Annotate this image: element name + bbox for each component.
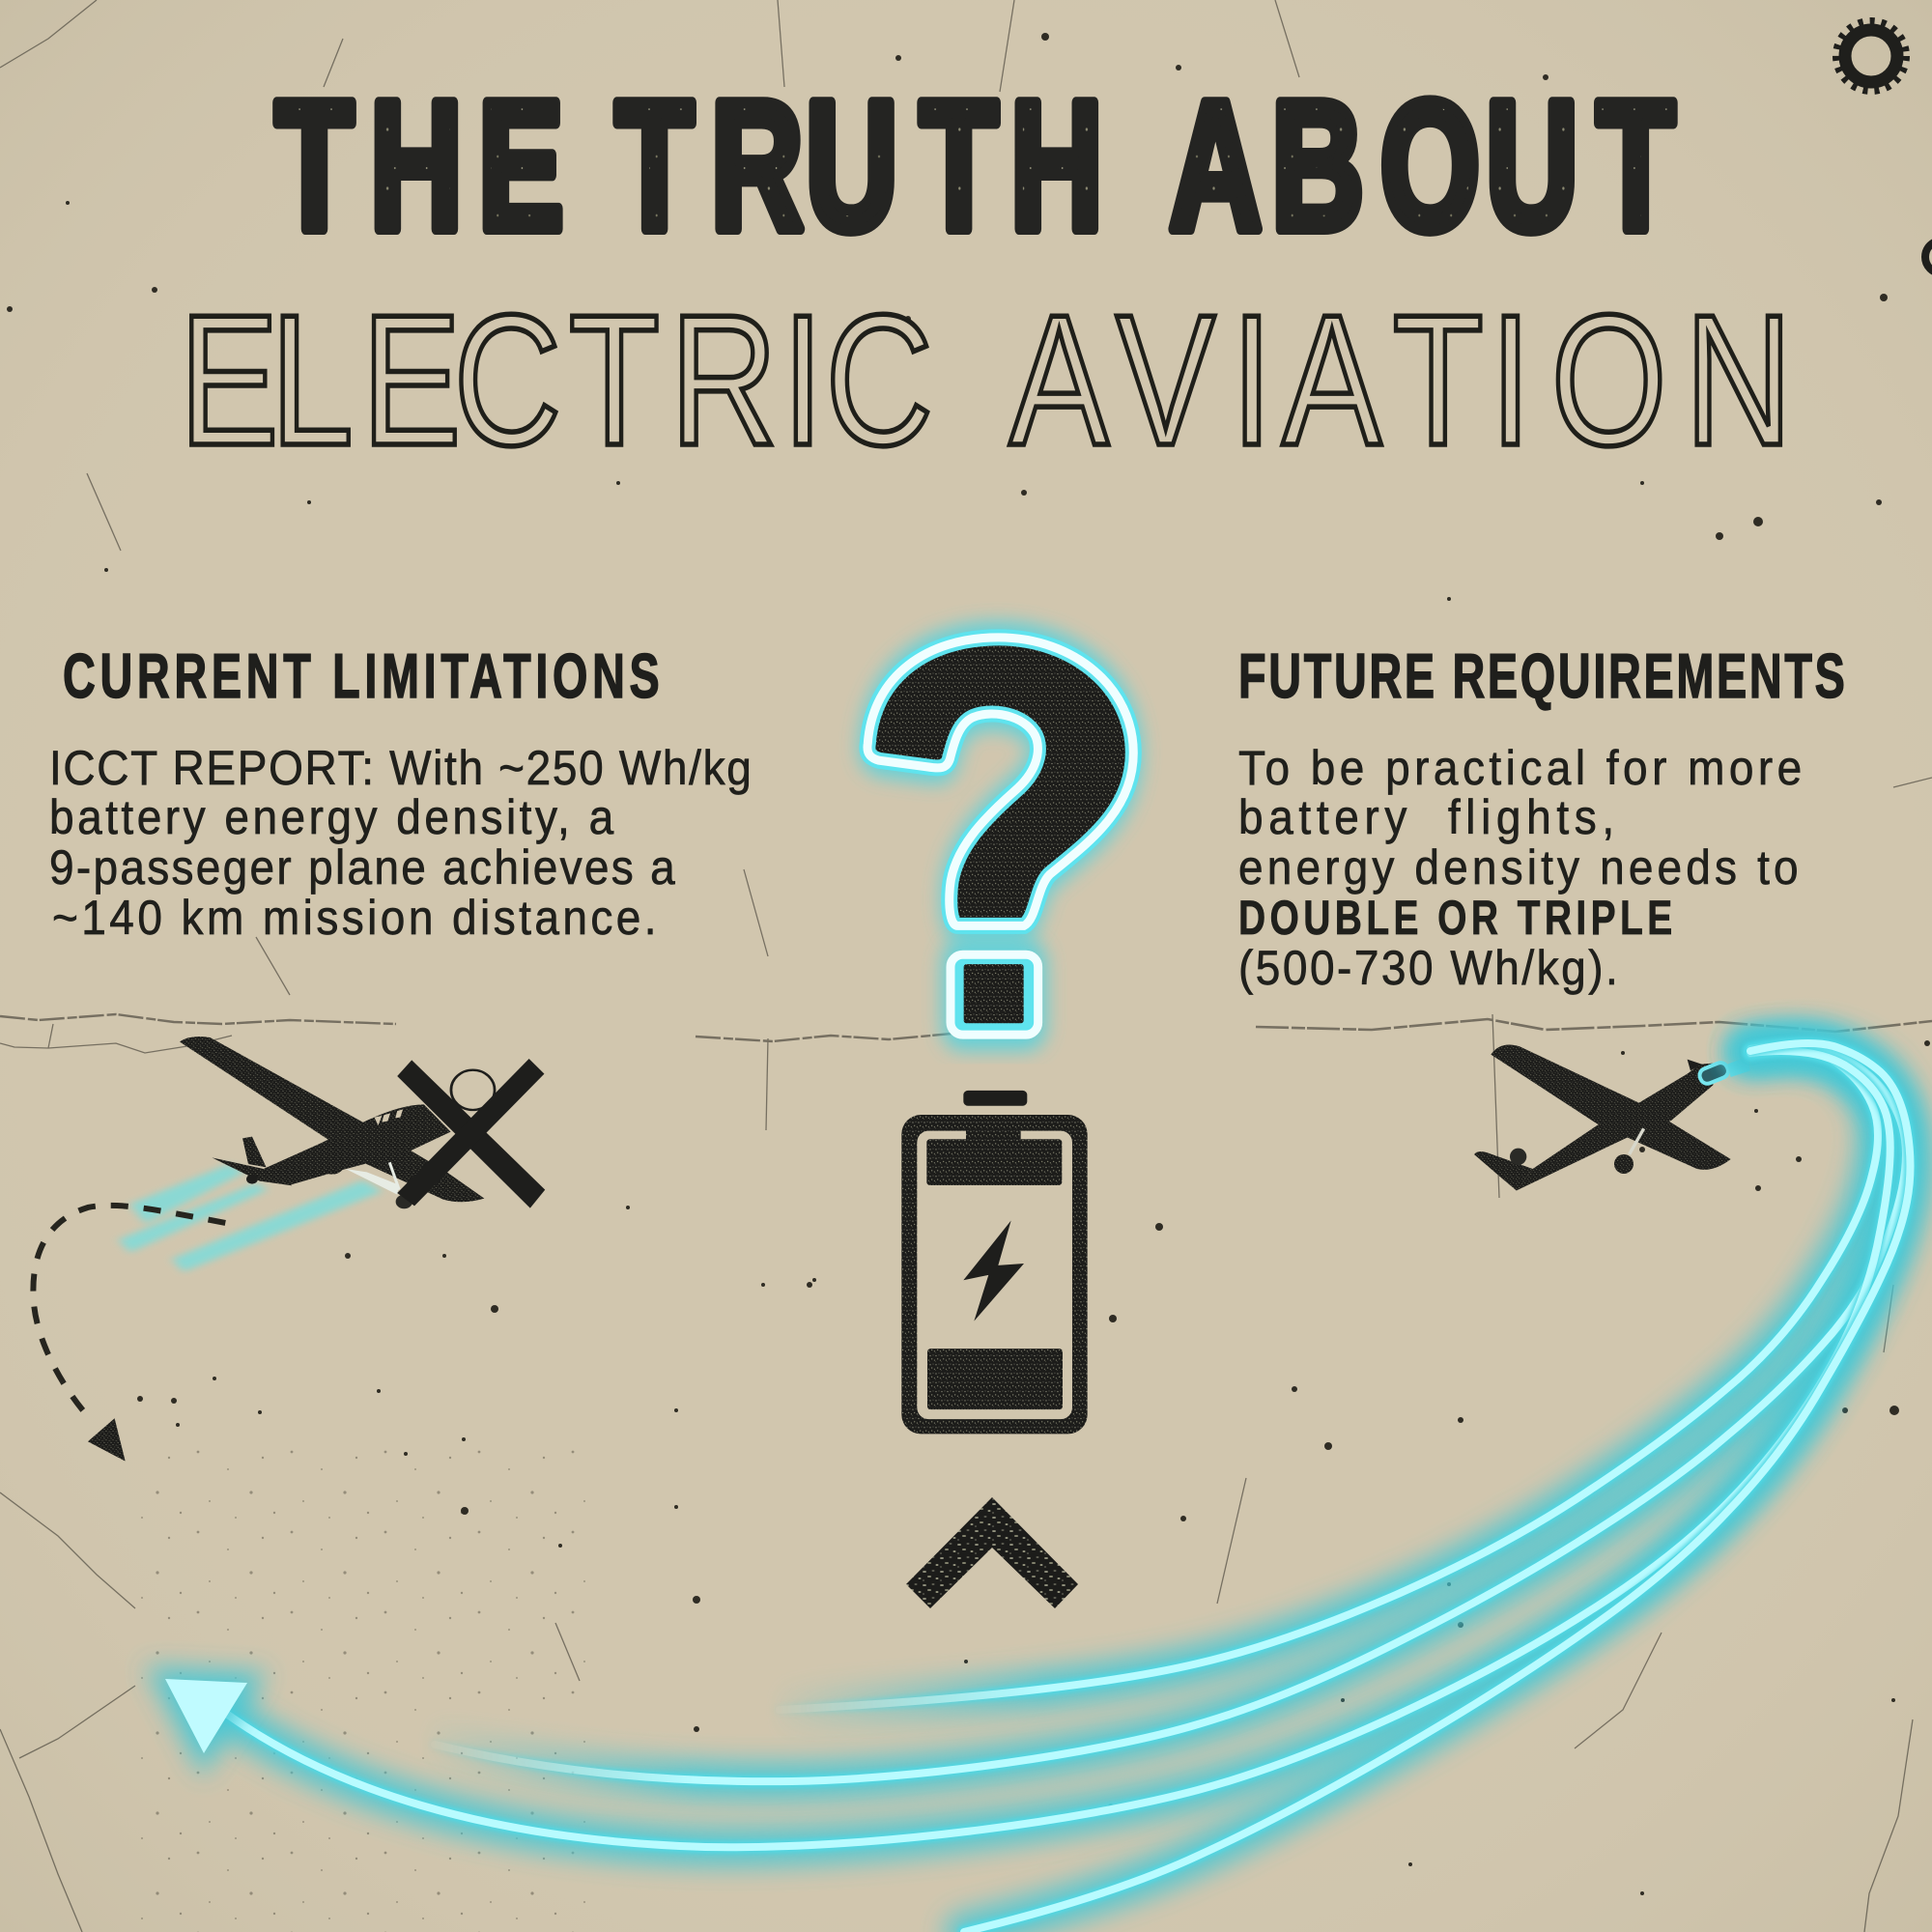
text block: future requirements: To be practical for more bbox=[1238, 742, 1802, 795]
text block: future requirements: DOUBLE OR TRIPLE bbox=[1238, 890, 1672, 945]
title: electric aviation: ELECTRIC AVIATION bbox=[180, 277, 1792, 485]
trail: upper short bbox=[780, 1050, 1878, 1710]
icon: gear stamp right edge bbox=[1925, 241, 1932, 273]
icon: glowing question mark bbox=[867, 638, 1133, 1037]
icon: battery with bolt bbox=[901, 1091, 1088, 1434]
heading: current limitations: CURRENT LIMITATIONS bbox=[63, 642, 660, 712]
trail: main to arrowhead bbox=[225, 1051, 1890, 1847]
arrow: neon arrowhead bbox=[165, 1679, 247, 1753]
title: the truth about: THE TRUTH ABOUT bbox=[275, 64, 1675, 269]
text block: current limitations: ~140 km mission distance. bbox=[52, 892, 657, 945]
icon: upward chevron bbox=[906, 1497, 1078, 1608]
text block: current limitations bbox=[49, 742, 752, 945]
text block: current limitations: battery energy density, a bbox=[49, 791, 613, 844]
trail: middle bbox=[435, 1045, 1906, 1781]
arrow: neon rising trails bbox=[225, 1043, 1911, 1932]
icon: plane right bbox=[1474, 1045, 1750, 1191]
text block: current limitations: ICCT REPORT: With ~250 Wh/kg bbox=[49, 742, 752, 795]
text block: future requirements bbox=[1238, 742, 1802, 995]
text block: future requirements: energy density needs to bbox=[1238, 841, 1799, 895]
icon: cyan exhaust streaks of left plane bbox=[119, 1164, 382, 1272]
arrow: dashed falling flight path bbox=[33, 1206, 225, 1462]
text block: current limitations: 9-passeger plane achieves a bbox=[49, 841, 675, 895]
heading: future requirements: FUTURE REQUIREMENTS bbox=[1238, 642, 1845, 712]
trail glow layer bbox=[225, 1043, 1911, 1932]
text block: future requirements: battery flights, bbox=[1238, 791, 1614, 844]
icon: gear stamp top right bbox=[1836, 21, 1906, 91]
trail: lower off page bbox=[964, 1043, 1911, 1932]
text block: future requirements: (500-730 Wh/kg). bbox=[1238, 942, 1618, 995]
icon: crossed-out plane left bbox=[180, 1037, 545, 1208]
